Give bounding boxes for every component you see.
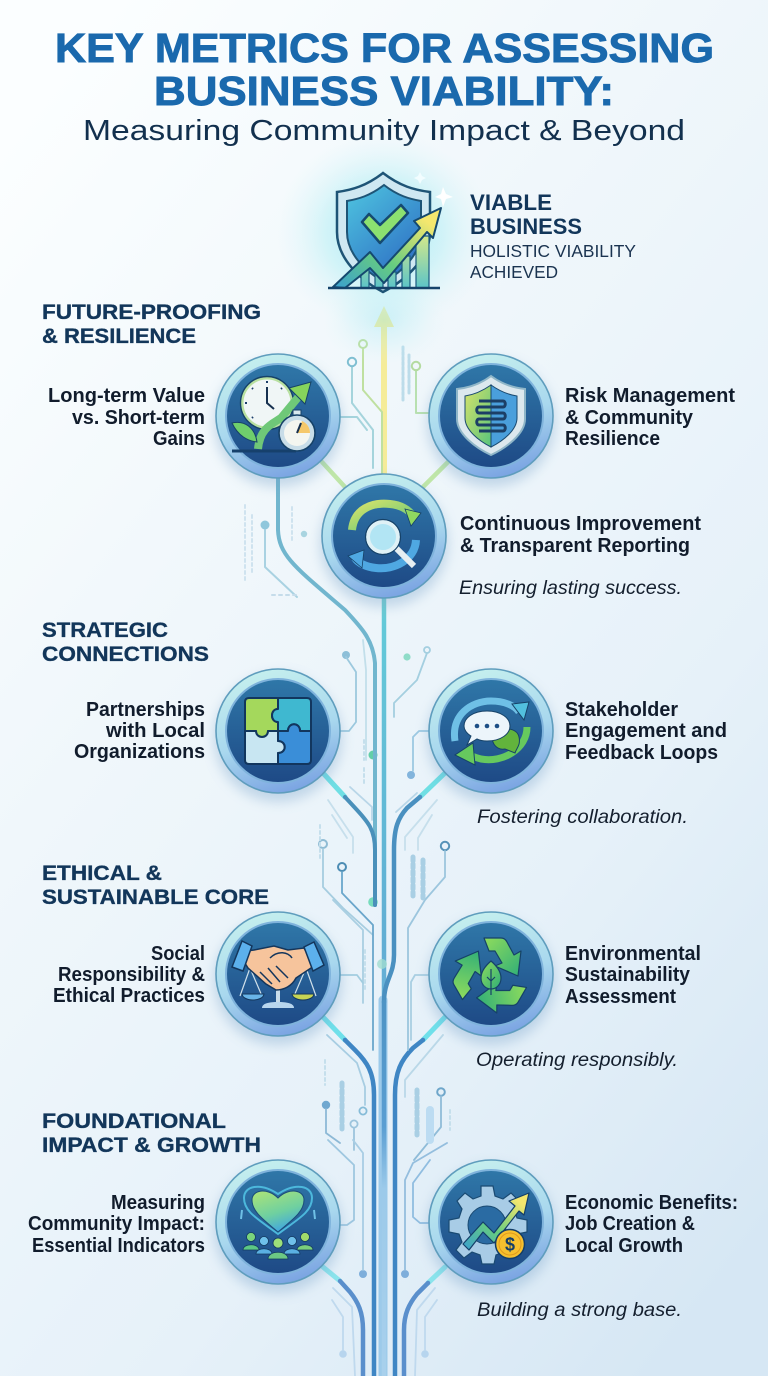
heading: strategic connections: [42, 618, 209, 666]
icon: recycling arrows with leaf: [427, 912, 555, 1045]
title: Measuring Community Impact & Beyond: [83, 115, 685, 147]
icon: continuous improvement magnifier: [320, 474, 448, 607]
note: fostering collaboration: Fostering collaboration.: [477, 806, 688, 828]
label: partnerships: Partnerships: [86, 699, 205, 721]
label: risk management: & Community: [565, 407, 694, 429]
icon: heart and community: [214, 1160, 342, 1293]
heading: ethical core: ETHICAL &: [42, 861, 162, 885]
label: economic benefits: Job Creation &: [565, 1213, 695, 1235]
icon: feedback loop speech bubbles: [427, 669, 555, 802]
icon: handshake and scales: [214, 912, 342, 1045]
label: economic benefits: Economic Benefits:: [565, 1192, 738, 1214]
heading: future-proofing: [42, 300, 261, 348]
top label: viable business: VIABLE: [470, 190, 552, 215]
label: continuous improvement: Continuous Improvement: [460, 513, 701, 535]
label: stakeholder engagement: Stakeholder: [565, 699, 678, 721]
label: environmental sustainability: [565, 943, 701, 1008]
heading: foundational impact: FOUNDATIONAL: [42, 1109, 226, 1133]
label: risk management: Risk Management: [565, 385, 735, 407]
top label: viable business: BUSINESS: [470, 214, 582, 239]
label: long-term value: [48, 385, 205, 450]
thin secondary traces: [319, 640, 450, 1376]
icon: puzzle pieces: [214, 669, 342, 802]
heading: future-proofing: FUTURE-PROOFING: [42, 300, 261, 324]
top traces: [245, 340, 448, 597]
label: stakeholder engagement: [565, 699, 727, 764]
label: long-term value: vs. Short-term: [72, 407, 205, 429]
heading: future-proofing: & RESILIENCE: [42, 324, 196, 348]
note: operating responsibly: Operating responsibly.: [476, 1049, 678, 1071]
label: measuring community impact: Community Impact:: [28, 1213, 205, 1235]
trace dots: [260, 520, 429, 1358]
icon: shield with spring: [427, 354, 555, 487]
label: continuous improvement: & Transparent Reporting: [460, 535, 690, 557]
label: long-term value: Long-term Value: [48, 385, 205, 407]
note: building a strong base: Building a strong base.: [477, 1299, 682, 1321]
top label: viable business: [470, 190, 636, 282]
label: measuring community impact: Measuring: [111, 1192, 205, 1214]
main branch lines: [278, 478, 445, 1376]
label: social responsibility: Responsibility &: [58, 964, 205, 986]
label: social responsibility: [53, 943, 205, 1007]
label: social responsibility: Ethical Practices: [53, 985, 205, 1007]
top label: viable business: HOLISTIC VIABILITY: [470, 241, 636, 261]
label: stakeholder engagement: Engagement and: [565, 720, 727, 742]
icon: gear, growth arrow and coin: [427, 1160, 555, 1293]
label: social responsibility: Social: [151, 943, 205, 965]
label: environmental sustainability: Assessment: [565, 986, 676, 1008]
label: continuous improvement: [460, 513, 701, 557]
title: KEY METRICS FOR ASSESSING: [55, 25, 714, 71]
label: economic benefits: [565, 1192, 738, 1257]
label: measuring community impact: [28, 1192, 205, 1257]
title: [55, 25, 714, 147]
heading: foundational impact: IMPACT & GROWTH: [42, 1133, 261, 1157]
top icon: shield with growth arrow: [276, 132, 492, 365]
label: long-term value: Gains: [153, 428, 205, 450]
label: stakeholder engagement: Feedback Loops: [565, 742, 718, 764]
central trunk with upward arrow: [374, 306, 394, 1376]
label: risk management: [565, 385, 735, 450]
icon: clock, sprout and stopwatch: [214, 354, 342, 487]
label: measuring community impact: Essential Indicators: [32, 1235, 205, 1257]
icon: gear, growth arrow and coin: $: [505, 1234, 515, 1254]
note: ensuring lasting success: Ensuring lasting success.: [459, 577, 682, 599]
label: risk management: Resilience: [565, 428, 660, 450]
label: economic benefits: Local Growth: [565, 1235, 683, 1257]
heading: ethical core: SUSTAINABLE CORE: [42, 885, 269, 909]
label: partnerships: with Local: [105, 720, 205, 742]
title: BUSINESS VIABILITY:: [154, 68, 614, 114]
heading: ethical core: [42, 861, 269, 909]
label: environmental sustainability: Sustainability: [565, 964, 691, 986]
heading: strategic connections: STRATEGIC: [42, 618, 168, 642]
label: environmental sustainability: Environmental: [565, 943, 701, 965]
heading: strategic connections: CONNECTIONS: [42, 642, 209, 666]
label: partnerships: [74, 699, 205, 763]
label: partnerships: Organizations: [74, 741, 205, 763]
heading: foundational impact: [42, 1109, 261, 1157]
top label: viable business: ACHIEVED: [470, 262, 558, 282]
circuit traces: [245, 306, 450, 1376]
